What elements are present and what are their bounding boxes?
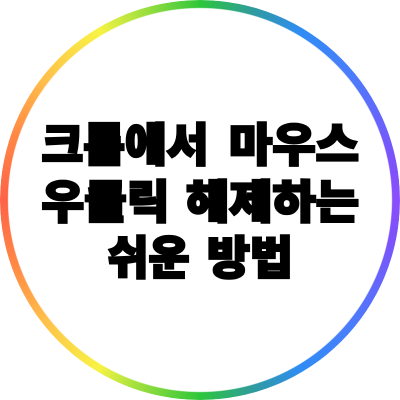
title line 3 [108,234,293,284]
title line 1: 마우스 [229,121,359,171]
title line 2: 해제하는 [186,178,359,228]
title line 1: 크롬에서 [42,121,209,171]
title line 2 [42,178,359,228]
title line 3: 쉬운 [108,234,190,284]
title line 2: 우클릭 [42,178,170,228]
title line 1 [42,121,359,171]
title line 3: 방법 [207,234,293,284]
